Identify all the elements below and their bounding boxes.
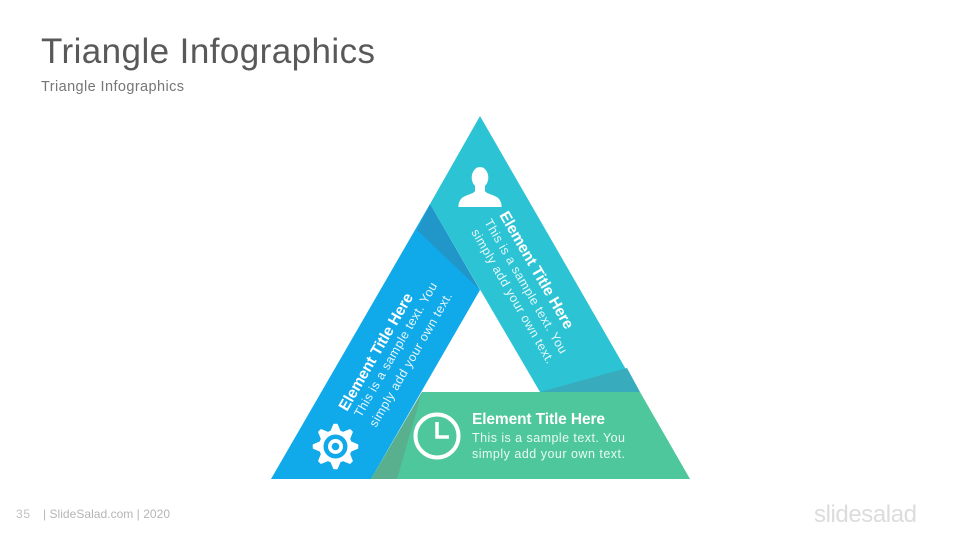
footer credit: | SlideSalad.com | 2020 <box>43 507 170 521</box>
footer page number: 35 <box>16 507 30 521</box>
text: left band heading: Element Title Here <box>336 290 417 414</box>
panel: green bottom band <box>371 392 690 479</box>
icon: person <box>458 167 502 207</box>
triangle diagram <box>271 116 690 479</box>
text: bottom band body line 2: simply add your own text. <box>472 447 625 461</box>
text: left band body line 1: This is a sample text. You <box>351 280 440 420</box>
panel: blue left band <box>271 204 480 479</box>
text: bottom band body line 1: This is a sample text. You <box>472 431 625 445</box>
text: top band body line 1: This is a sample text. You <box>481 216 570 356</box>
band fold shadow <box>417 204 480 290</box>
panel: cyan top band <box>430 116 640 392</box>
subtitle: Triangle Infographics <box>41 79 184 95</box>
band fold shadow <box>371 392 422 479</box>
band fold shadow <box>540 368 640 392</box>
text: bottom band heading: Element Title Here <box>472 411 605 428</box>
icon: gear <box>314 424 358 468</box>
title: Triangle Infographics <box>41 32 375 71</box>
icon: clock <box>416 414 458 458</box>
text: top band body line 2: simply add your own text. <box>468 226 557 366</box>
text: left band body line 2: simply add your own text. <box>366 290 455 430</box>
text: top band heading: Element Title Here <box>496 208 577 333</box>
logo wordmark: slidesalad <box>814 501 917 528</box>
